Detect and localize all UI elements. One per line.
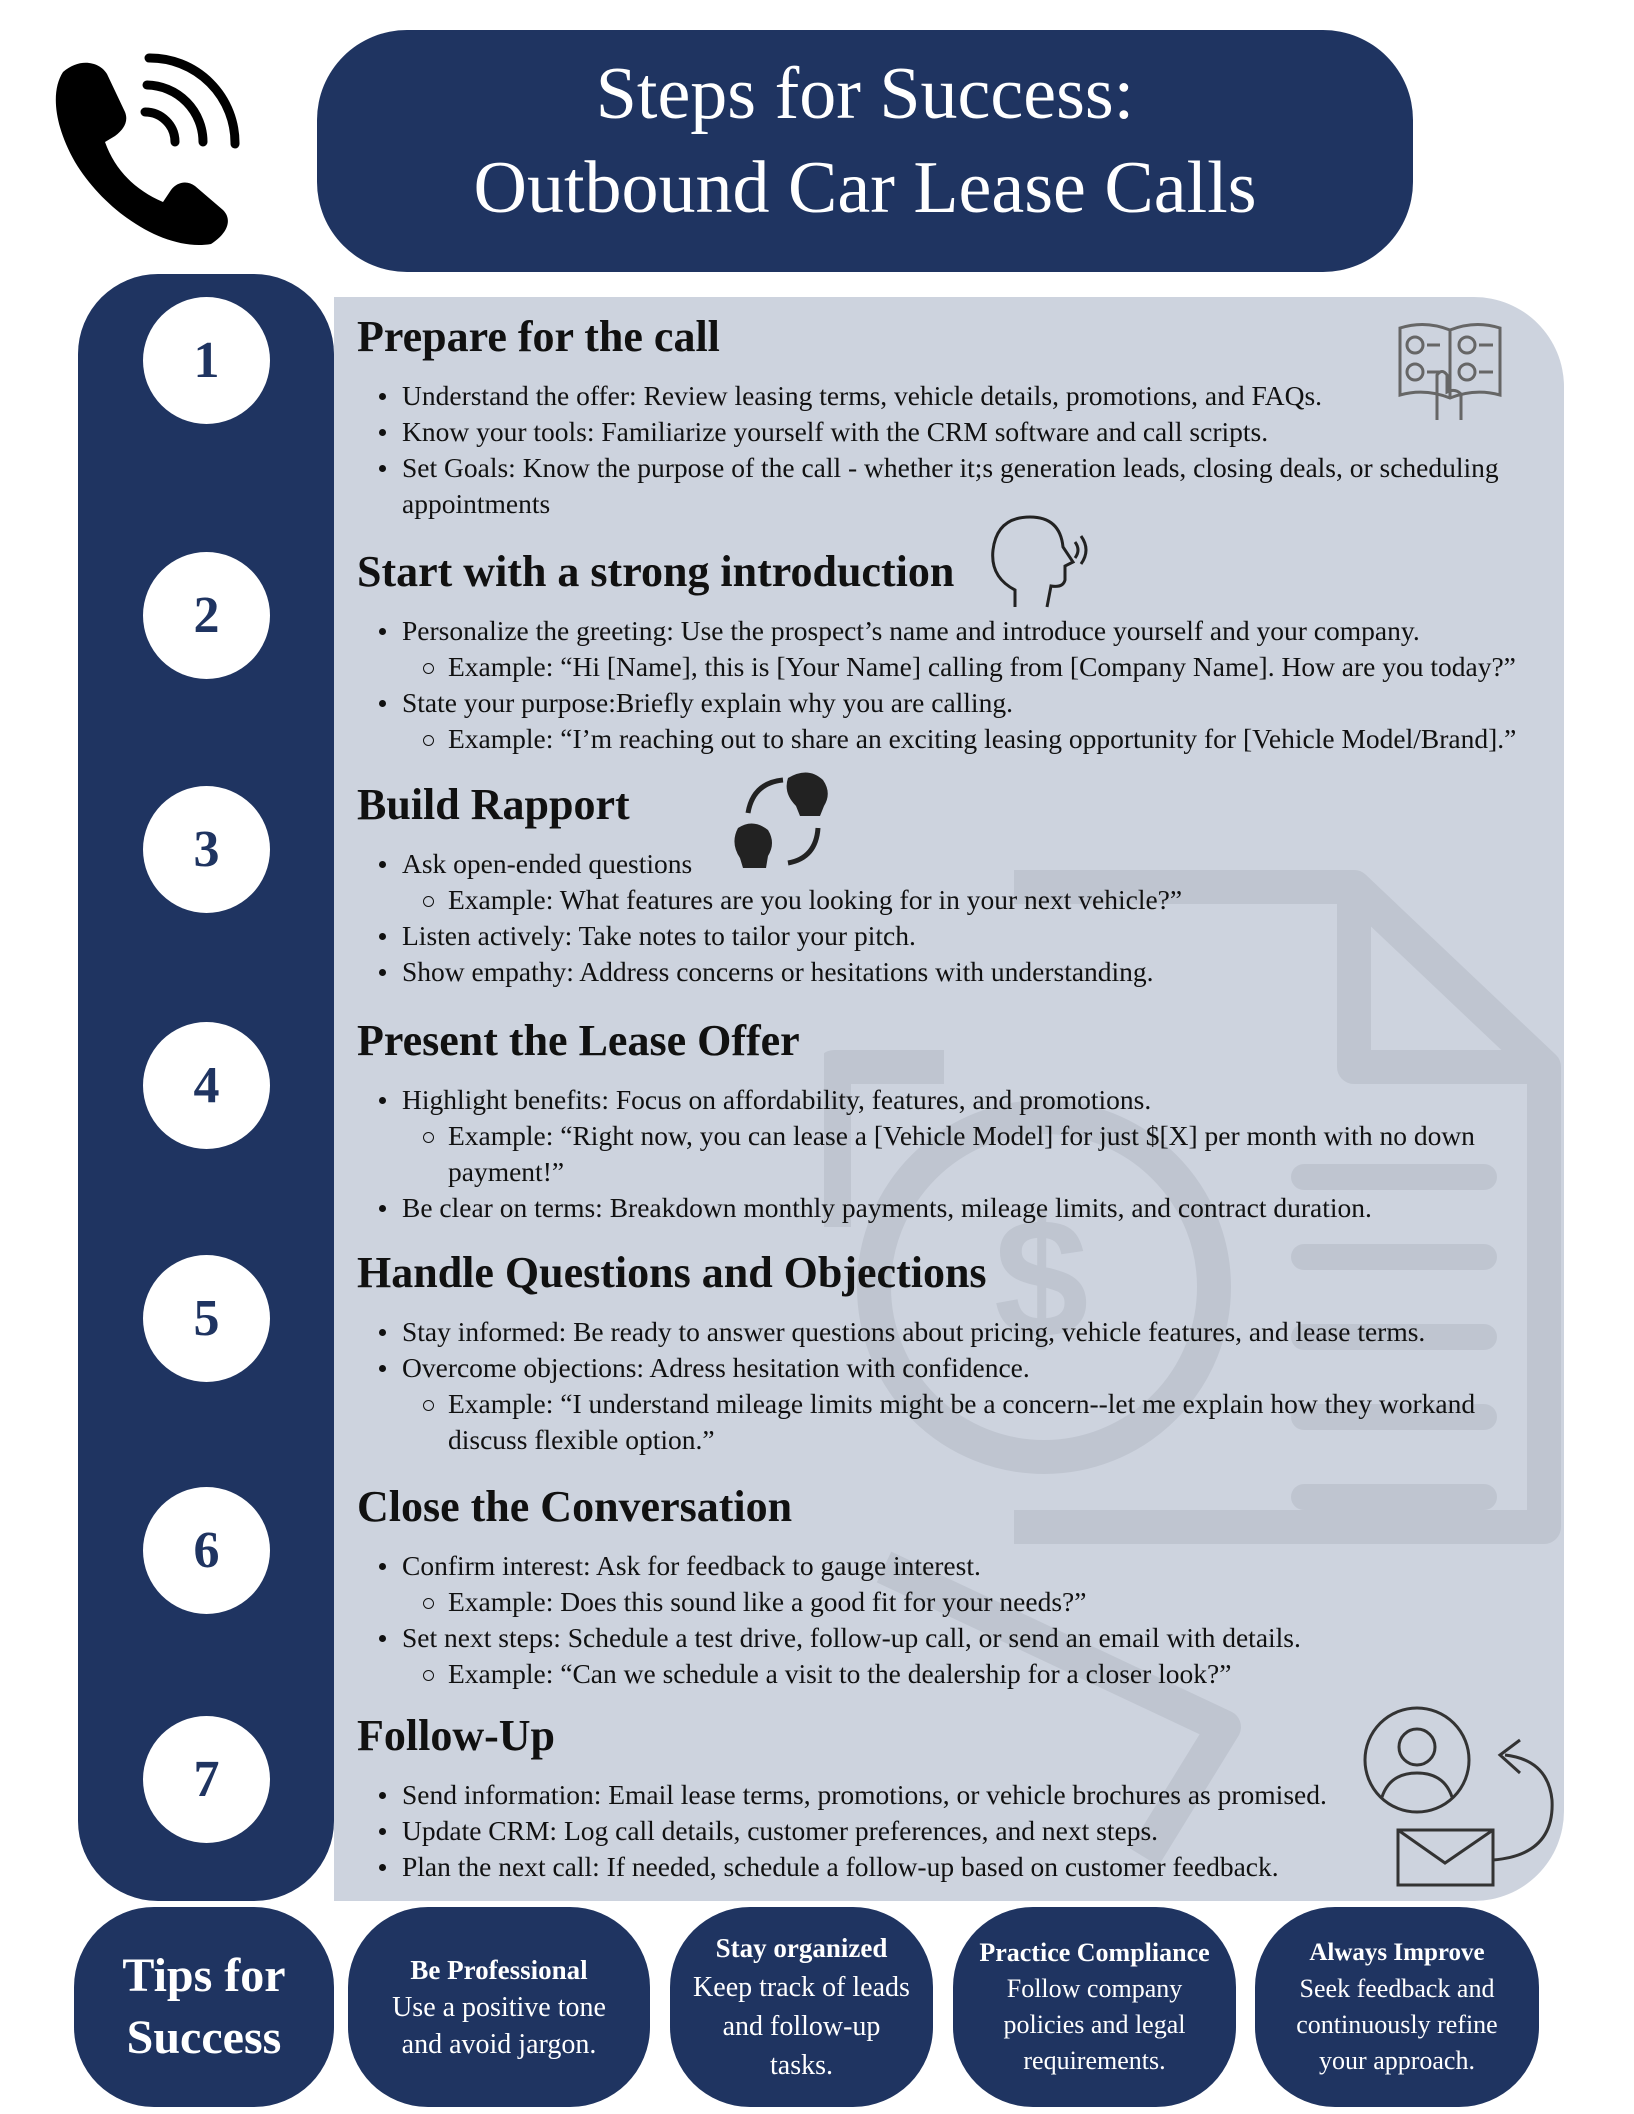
title: Steps for Success:	[596, 53, 1134, 135]
circle 3: 3	[194, 821, 220, 878]
tip: Be Professional: Be Professional	[410, 1954, 588, 1984]
tip: Stay organized: and follow-up	[723, 2011, 880, 2042]
section 3: Example: What features are you looking for in your next vehicle?”	[448, 884, 1182, 915]
section 5: Handle Questions and Objections	[357, 1248, 987, 1297]
section 7: Follow-Up	[357, 1711, 555, 1760]
section 2: Personalize the greeting: Use the prospect’s name and introduce yourself and your company.	[402, 615, 1420, 646]
section 4: Example: “Right now, you can lease a [Vehicle Model] for just $[X] per month with no down payment!”	[448, 1120, 1475, 1187]
tip: Stay organized	[670, 1907, 933, 2107]
section 2: State your purpose:Briefly explain why you are calling.	[402, 687, 1013, 718]
watermark: document and money: $	[994, 1184, 1089, 1374]
tip: Practice Compliance: Practice Compliance	[979, 1938, 1210, 1967]
section 7	[357, 1711, 1327, 1882]
circle 7	[143, 1716, 270, 1843]
icon: phone	[56, 54, 240, 245]
section 6: Close the Conversation	[357, 1482, 792, 1531]
section 6: Confirm interest: Ask for feedback to gauge interest.	[402, 1550, 981, 1581]
circle 4: 4	[194, 1057, 220, 1114]
circle 2: 2	[194, 587, 220, 644]
section 3: Build Rapport	[357, 780, 630, 829]
section 6: Example: Does this sound like a good fit for your needs?”	[448, 1586, 1086, 1617]
section 3: Listen actively: Take notes to tailor your pitch.	[402, 920, 916, 951]
circle 7: 7	[194, 1751, 220, 1808]
section 7: Update CRM: Log call details, customer preferences, and next steps.	[402, 1815, 1158, 1846]
icon: numbered list	[1398, 323, 1502, 420]
circle 1: 1	[194, 332, 220, 389]
tip: Practice Compliance	[953, 1907, 1236, 2107]
circle 6: 6	[194, 1522, 220, 1579]
tip: Stay organized: Keep track of leads	[693, 1972, 910, 2003]
title	[317, 30, 1413, 272]
circle 1	[143, 297, 270, 424]
title: Outbound Car Lease Calls	[474, 147, 1256, 229]
section 6: Example: “Can we schedule a visit to the dealership for a closer look?”	[448, 1658, 1231, 1689]
section 3: Ask open-ended questions	[402, 848, 692, 879]
icon: person email follow-up	[1364, 1706, 1554, 1886]
tip: Tips for Success	[74, 1907, 334, 2107]
section 7: Plan the next call: If needed, schedule a follow-up based on customer feedback.	[402, 1851, 1279, 1882]
section 4	[357, 1016, 1475, 1223]
tip: Stay organized: tasks.	[770, 2050, 833, 2081]
tip: Always Improve: Always Improve	[1309, 1939, 1485, 1966]
circle 5: 5	[194, 1290, 220, 1347]
section 5	[357, 1248, 1475, 1455]
section 3: Show empathy: Address concerns or hesitations with understanding.	[402, 956, 1154, 987]
tip: Be Professional: and avoid jargon.	[402, 2028, 596, 2060]
section 4: Present the Lease Offer	[357, 1016, 800, 1065]
tip: Stay organized: Stay organized	[716, 1933, 887, 1963]
tip: Be Professional: Use a positive tone	[392, 1992, 606, 2022]
icon: two heads exchanging	[734, 772, 828, 868]
section 5: Example: “I understand mileage limits might be a concern--let me explain how they workand discuss flexible option.”	[448, 1388, 1475, 1455]
section 2: Example: “Hi [Name], this is [Your Name] calling from [Company Name]. How are you today?”	[448, 651, 1516, 682]
tip: Practice Compliance: Follow company	[1007, 1974, 1182, 2003]
circle 3	[143, 786, 270, 913]
step circles	[143, 297, 270, 1843]
tip: Always Improve: Seek feedback and	[1300, 1974, 1494, 2003]
section 6	[357, 1482, 1301, 1689]
section 2: Example: “I’m reaching out to share an exciting leasing opportunity for [Vehicle Model/Brand].”	[448, 723, 1516, 754]
tip: Tips for Success: Success	[127, 2011, 281, 2064]
tip: Be Professional	[348, 1907, 650, 2107]
tip: Always Improve: your approach.	[1319, 2046, 1475, 2075]
icon: speaking head	[991, 516, 1088, 608]
circle 5	[143, 1255, 270, 1382]
section 5: Overcome objections: Adress hesitation with confidence.	[402, 1352, 1030, 1383]
section 1: Set Goals: Know the purpose of the call - whether it;s generation leads, closing deals, or scheduling appointments	[402, 452, 1499, 519]
section 1: Know your tools: Familiarize yourself with the CRM software and call scripts.	[402, 416, 1268, 447]
section 7: Send information: Email lease terms, promotions, or vehicle brochures as promised.	[402, 1779, 1327, 1810]
circle 4	[143, 1022, 270, 1149]
section 2: Start with a strong introduction	[357, 547, 954, 596]
panel: step numbers column	[78, 274, 334, 1901]
section 3	[357, 780, 1182, 987]
watermark: document and money	[824, 870, 1561, 1866]
section 5: Stay informed: Be ready to answer questions about pricing, vehicle features, and lease terms.	[402, 1316, 1425, 1347]
section 1: Understand the offer: Review leasing terms, vehicle details, promotions, and FAQs.	[402, 380, 1322, 411]
circle 2	[143, 552, 270, 679]
tip: Tips for Success: Tips for	[122, 1949, 286, 2002]
panel: content background	[334, 297, 1564, 1901]
tip: Always Improve	[1255, 1907, 1539, 2107]
circle 6	[143, 1487, 270, 1614]
tip: Practice Compliance: policies and legal	[1004, 2010, 1185, 2039]
section 6: Set next steps: Schedule a test drive, follow-up call, or send an email with details.	[402, 1622, 1301, 1653]
section 1	[357, 312, 1499, 519]
tip: Always Improve: continuously refine	[1296, 2010, 1498, 2039]
tip: Practice Compliance: requirements.	[1023, 2046, 1166, 2075]
section 2	[357, 547, 1516, 754]
section 4: Be clear on terms: Breakdown monthly payments, mileage limits, and contract duration.	[402, 1192, 1372, 1223]
section 4: Highlight benefits: Focus on affordability, features, and promotions.	[402, 1084, 1151, 1115]
section 1: Prepare for the call	[357, 312, 720, 361]
